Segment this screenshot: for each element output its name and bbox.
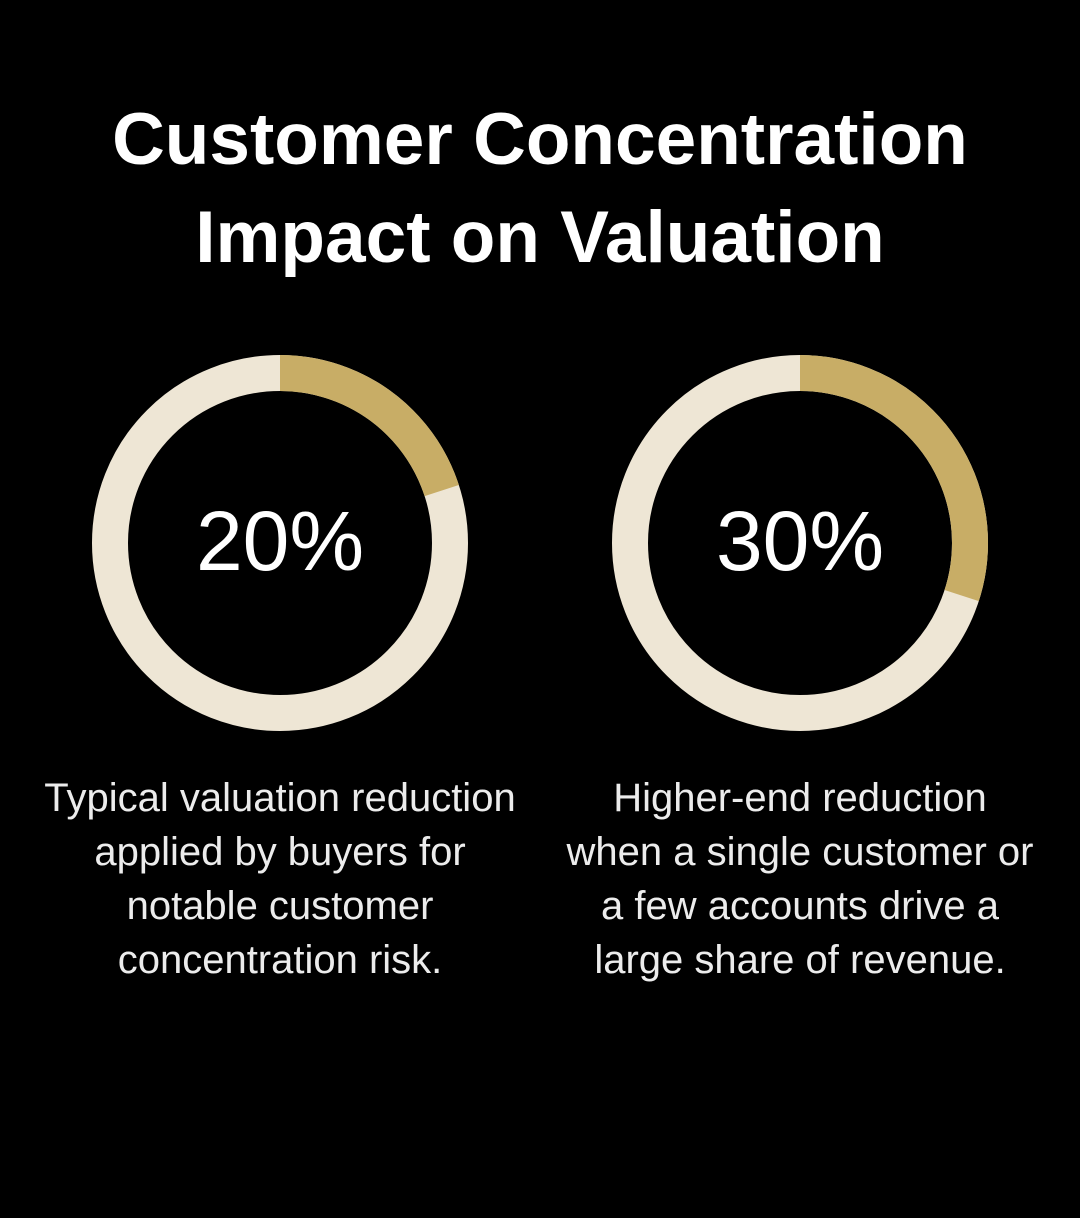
text: 20% description bbox=[44, 776, 516, 982]
text: 20% description: applied by buyers for bbox=[94, 830, 466, 874]
title: Customer Concentration bbox=[112, 99, 968, 180]
donut: 20% bbox=[110, 373, 450, 713]
text: 30% description: a few accounts drive a bbox=[601, 884, 999, 928]
text: 30% description bbox=[566, 776, 1033, 982]
text: 30% description: large share of revenue. bbox=[594, 938, 1006, 982]
text: 30% description: Higher-end reduction bbox=[613, 776, 987, 820]
text: 30% description: when a single customer or bbox=[567, 830, 1033, 874]
donut: 20%: 20% bbox=[196, 494, 364, 588]
text: 20% description: Typical valuation reduction bbox=[44, 776, 516, 820]
title: Impact on Valuation bbox=[195, 197, 885, 278]
donut: 30%: 30% bbox=[716, 494, 884, 588]
title bbox=[112, 99, 968, 278]
donut: 30% bbox=[630, 373, 970, 713]
text: 20% description: concentration risk. bbox=[118, 938, 442, 982]
text: 20% description: notable customer bbox=[127, 884, 433, 928]
